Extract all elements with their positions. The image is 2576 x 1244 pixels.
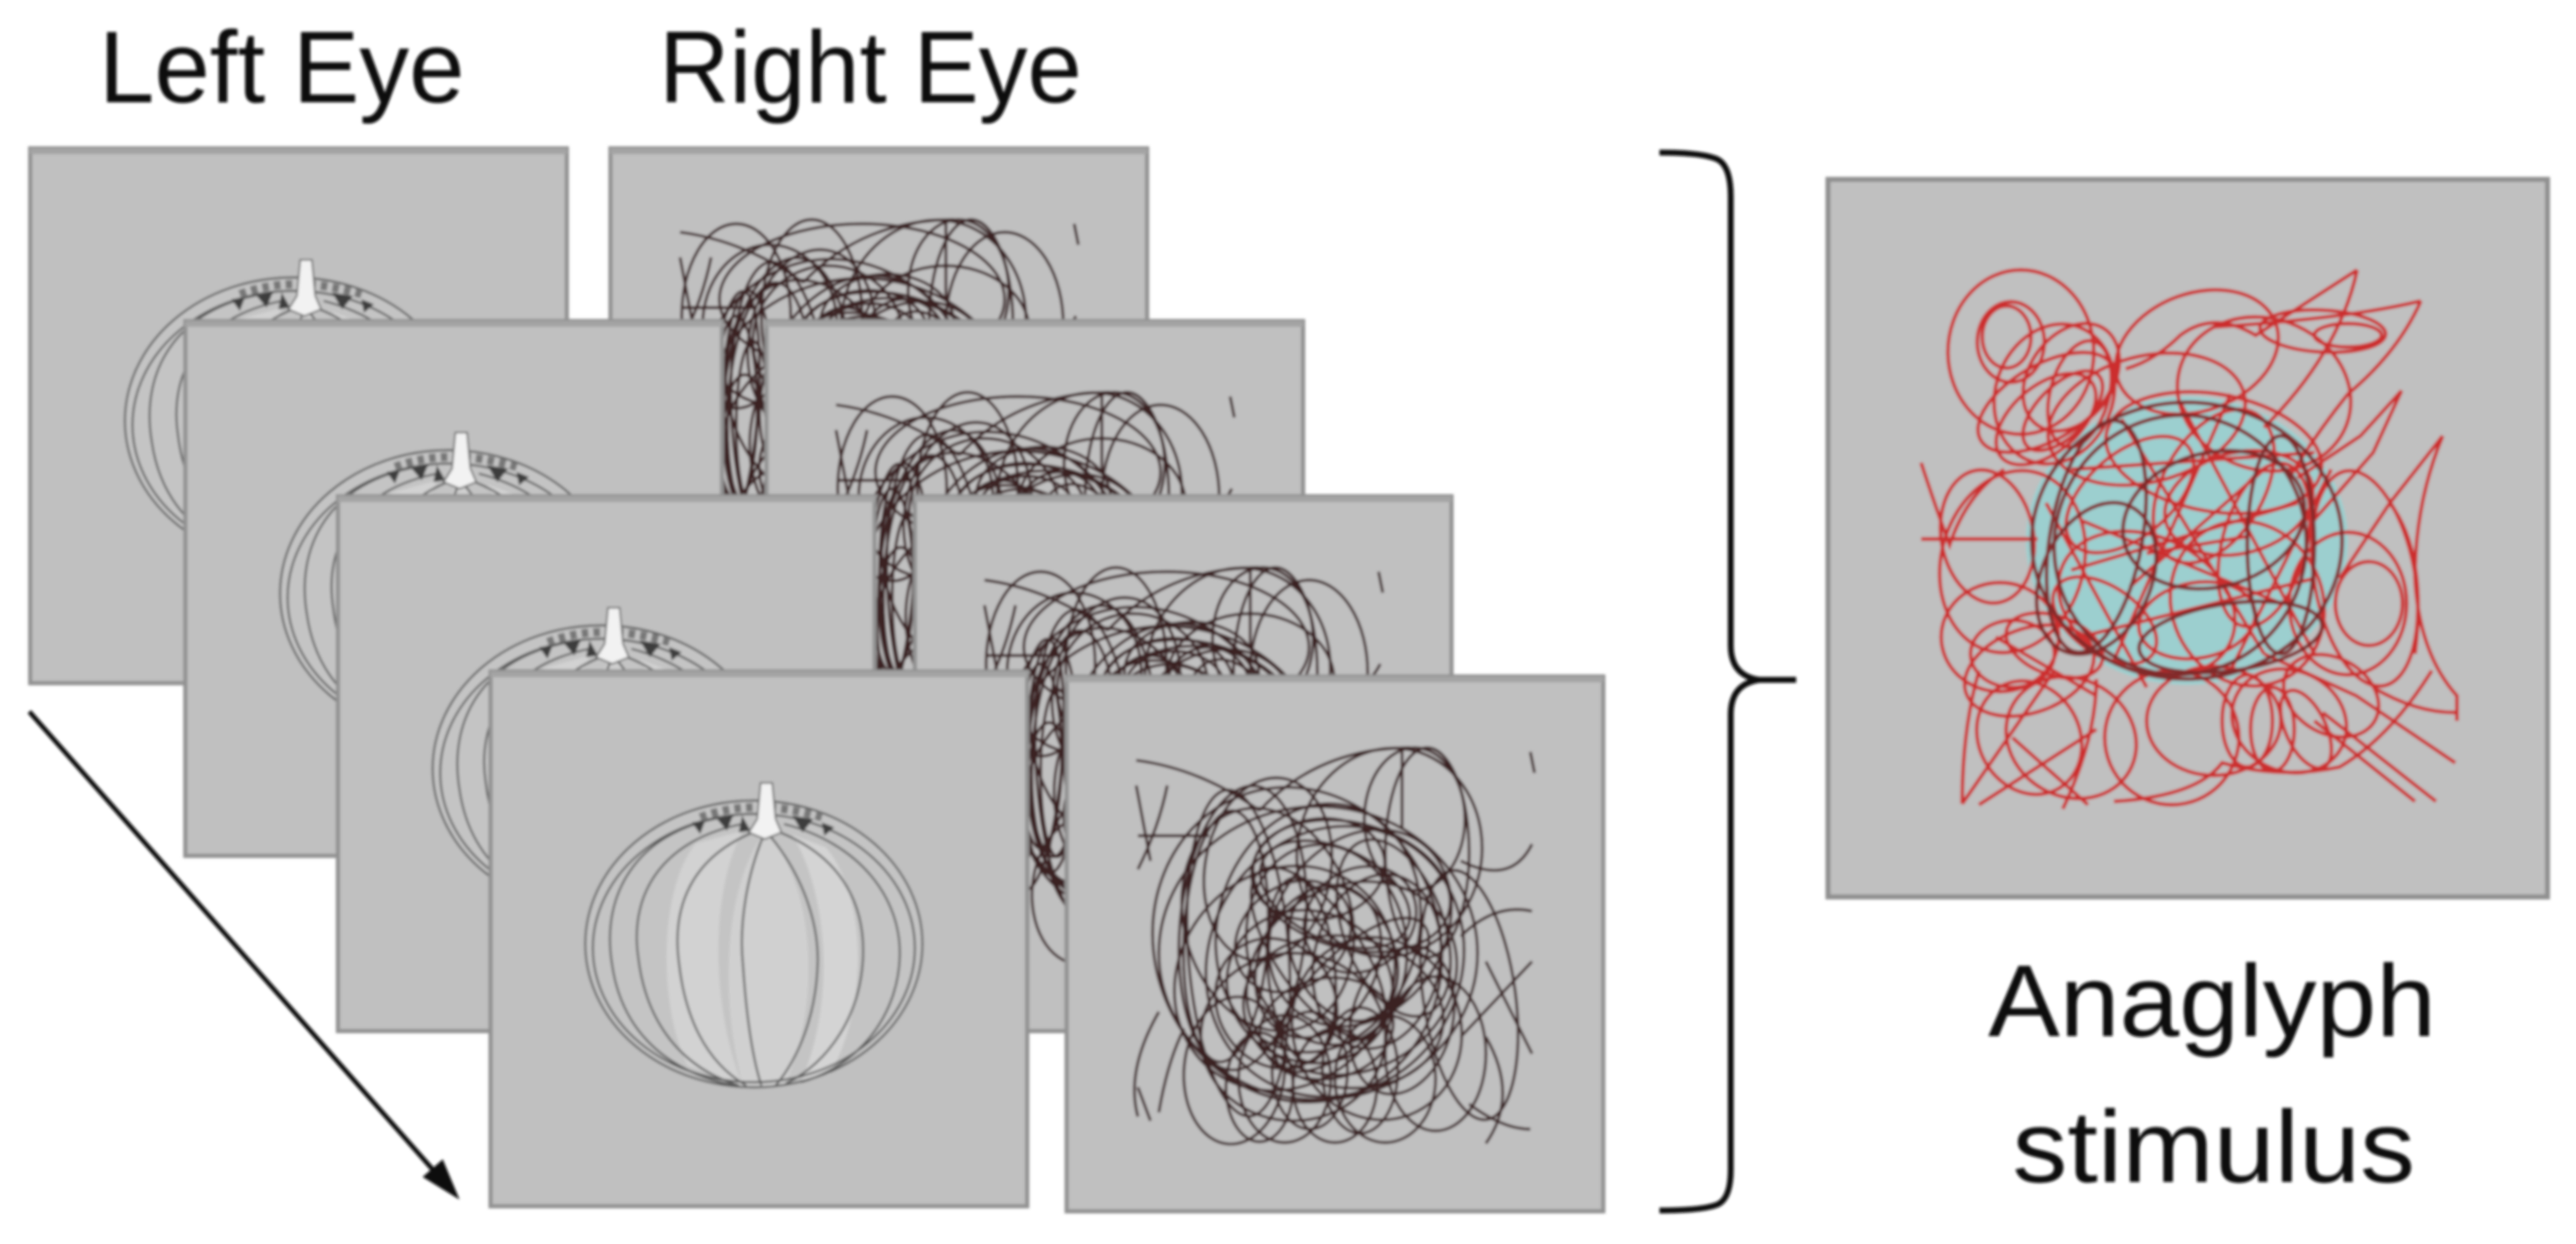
panel: anaglyph stimulus: [1828, 179, 2547, 897]
caption: stimulus: stimulus: [2012, 1090, 2415, 1204]
panel: right eye frame 4 with scribble: [1067, 676, 1603, 1211]
red scribble: [1919, 268, 2457, 822]
panel: right eye frame 3: [915, 496, 1452, 1031]
heading: Left Eye: Left Eye: [99, 10, 465, 124]
caption: Anaglyph: Anaglyph: [1988, 944, 2436, 1058]
dark pumpkin outline: [2013, 386, 2342, 703]
heading: Right Eye: Right Eye: [659, 10, 1082, 124]
panel: right eye frame 1: [610, 148, 1147, 683]
panel: left eye frame 2: [185, 321, 722, 856]
panel: left eye frame 1: [30, 148, 567, 683]
cyan pumpkin: [2026, 397, 2348, 685]
panel: right eye frame 2: [766, 321, 1303, 856]
arrow: time progression: [29, 712, 460, 1200]
panel: left eye frame 3: [338, 496, 875, 1031]
panel: left eye frame 4 with pumpkin: [491, 671, 1027, 1206]
bracket: combines frames into anaglyph: [1659, 153, 1796, 1210]
